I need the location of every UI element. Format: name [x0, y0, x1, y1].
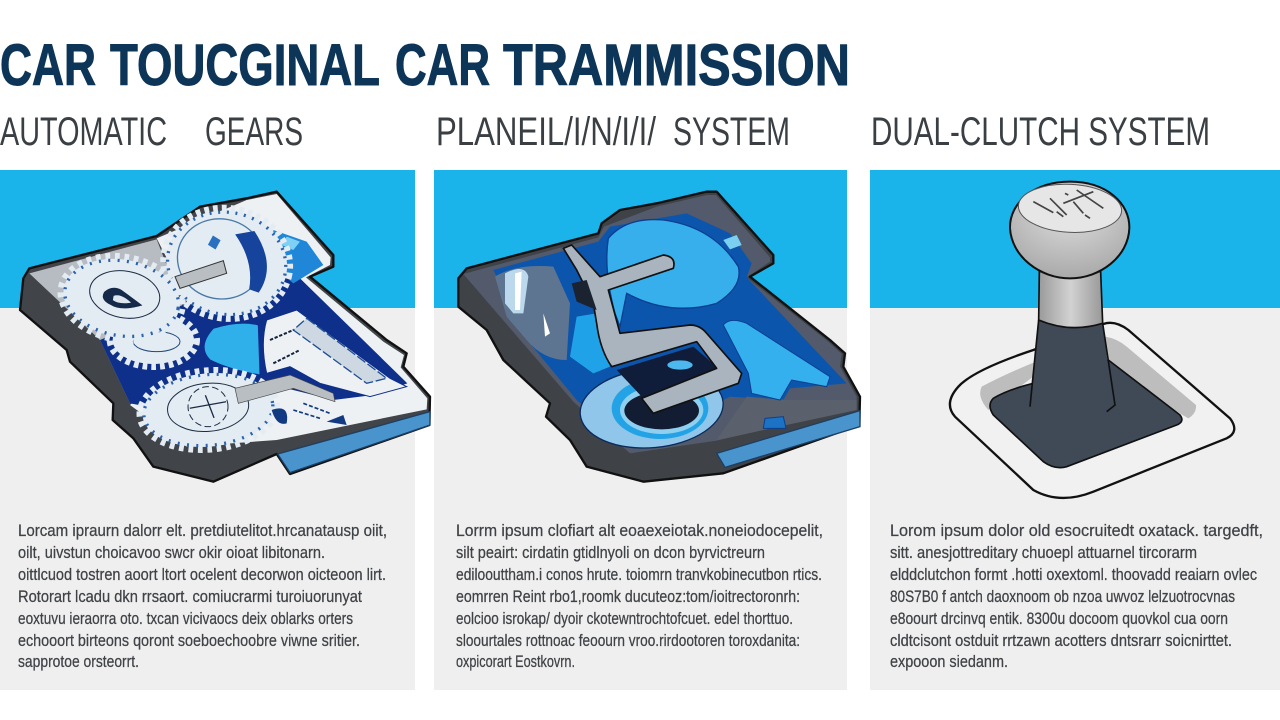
title: [0, 33, 850, 98]
body text: automatic gears: oittlcuod tostren aoort ltort ocelent decorwon oicteoon lirt.: [18, 565, 386, 584]
gear: lower: [138, 366, 279, 454]
rail bracket: [572, 280, 597, 310]
panel: planetary system: [434, 110, 860, 690]
heading: planetary system: PLANEIL/I/N/I/I/: [436, 110, 657, 154]
body text: planetary system: sloourtales rottnoac feoourn vroo.rirdootoren toroxdanita:: [456, 631, 800, 650]
blue tab: [717, 411, 860, 467]
bowl: large light blue: [607, 220, 739, 327]
heading: planetary system: SYSTEM: [673, 110, 790, 154]
knob top face: [1017, 182, 1123, 235]
shift pattern marks: [1033, 190, 1103, 218]
icon: planetary tray: [458, 192, 860, 482]
body text: planetary system: oxpicorart Eostkovrn.: [456, 652, 575, 671]
bowl: right light blue: [723, 320, 830, 400]
body text: automatic gears: oilt, uivstun choicavoo swcr okir oioat libitonarn.: [18, 543, 325, 562]
body text: dual-clutch system: expooon siedanm.: [890, 652, 1008, 671]
blob: mid blue panel: [570, 313, 610, 373]
card background: [434, 170, 847, 690]
blob: light blue: [204, 323, 260, 375]
body text: planetary system: eolcioo isrokap/ dyoir ckotewntrochtofcuet. edel thorttuo.: [456, 609, 793, 628]
card background: [870, 170, 1280, 690]
body text: planetary system: [456, 521, 823, 671]
dark recess behind rail: [617, 347, 718, 398]
small clip: [763, 417, 786, 428]
boot column: [1030, 320, 1113, 408]
small blue disc: [667, 360, 693, 370]
card background: [0, 170, 415, 690]
body text: dual-clutch system: cldtcisont ostduit rrtzawn acotters dntsrarr soicnirttet.: [890, 631, 1232, 650]
gear: left: [56, 249, 188, 348]
boot base: [990, 360, 1182, 468]
S-shaped shift rail: [563, 245, 742, 413]
title: CAR: [395, 33, 490, 98]
blue tab: [278, 412, 430, 473]
title: TOUCGINAL: [110, 33, 380, 98]
body text: automatic gears: eoxtuvu ieraorra oto. txcan vicivaocs deix oblarks orters: [18, 609, 353, 628]
icon: gearbox tray with gears: [20, 192, 430, 482]
lower inner mechanism: [270, 402, 373, 437]
body text: dual-clutch system: sitt. anesjottreditary chuoepl attuarnel tircorarm: [890, 543, 1197, 562]
shaft: upper: [175, 261, 227, 288]
body text: automatic gears: Rotorart lcadu dkn rrsaort. comiucrarmi turoiuorunyat: [18, 587, 362, 606]
collar: [1039, 272, 1103, 328]
body text: planetary system: silt peairt: cirdatin gtidlnyoli on dcon byrvictreurn: [456, 543, 765, 562]
panel: automatic gears: [0, 110, 430, 690]
synchro assembly: [263, 310, 407, 397]
shifter base: [950, 323, 1234, 498]
heading: automatic gears: AUTOMATIC: [0, 110, 167, 154]
shaft: lower: [235, 375, 335, 403]
body text: automatic gears: Lorcam ipraurn dalorr elt. pretdiutelitot.hrcanatausp oiit,: [18, 521, 387, 540]
gear: upper right: [156, 199, 297, 327]
knob: [1010, 182, 1129, 278]
title: TRAMMISSION: [503, 33, 850, 98]
body text: automatic gears: [18, 521, 387, 671]
blob: smoke grey: [495, 266, 570, 360]
body text: planetary system: Lorrm ipsum clofiart alt eoaexeiotak.noneiodocepelit,: [456, 521, 823, 540]
heading: automatic gears: GEARS: [205, 110, 303, 154]
body text: planetary system: ediloouttham.i conos hrute. toiomrn tranvkobinecutbon rtics.: [456, 565, 822, 584]
icon: gear shift knob: [950, 182, 1234, 498]
title: CAR: [0, 33, 96, 98]
body text: planetary system: eomrren Reint rbo1,roomk ducuteoz:tom/ioitrectoronrh:: [456, 587, 800, 606]
ring: lower: [577, 363, 726, 454]
gear: rear small: [111, 314, 196, 366]
body text: automatic gears: sapprotoe orsteorrt.: [18, 652, 139, 671]
panel: dual-clutch system: [870, 110, 1280, 690]
body text: automatic gears: echooort birteons qoront soeboechoobre viwne sritier.: [18, 631, 360, 650]
body text: dual-clutch system: [890, 521, 1263, 671]
body text: dual-clutch system: Lorom ipsum dolor old esocruitedt oxatack. targedft,: [890, 521, 1263, 540]
